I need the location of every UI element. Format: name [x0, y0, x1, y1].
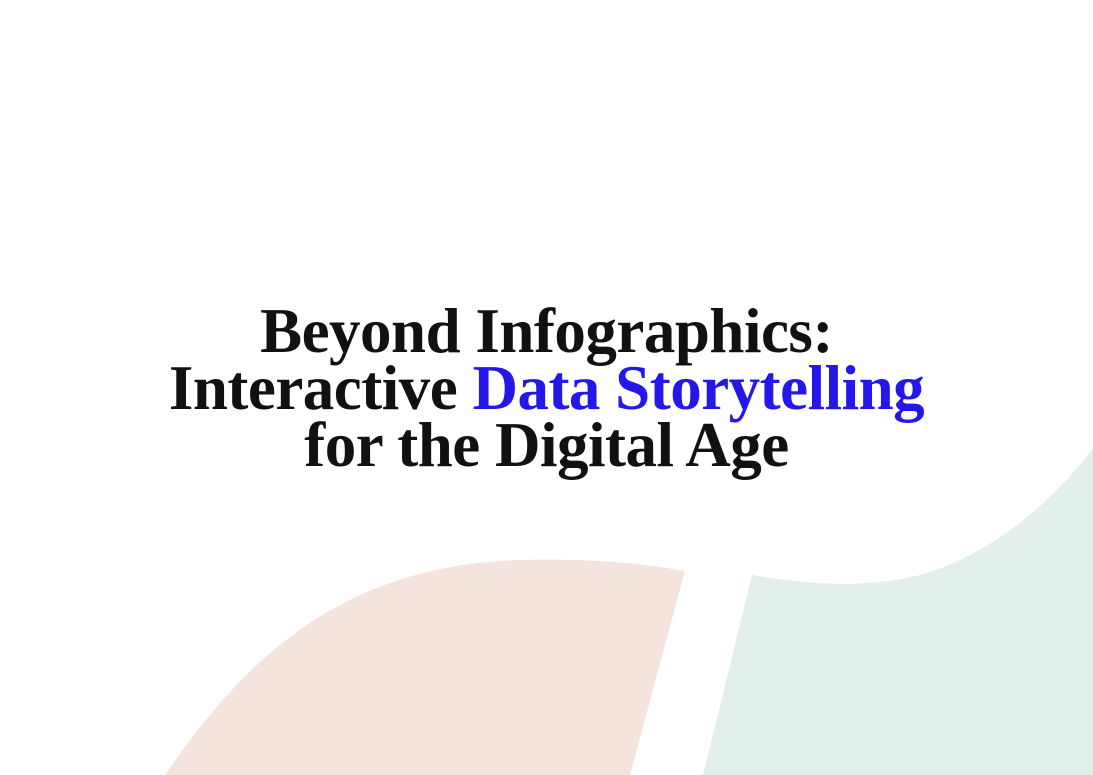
title: Beyond Infographics:: [260, 296, 833, 366]
shape: green leaf: [703, 448, 1093, 775]
title: for the Digital Age: [304, 410, 789, 480]
shape: pink leaf: [165, 560, 685, 775]
title: Interactive Data Storytelling: [169, 353, 924, 423]
title: [169, 296, 924, 480]
